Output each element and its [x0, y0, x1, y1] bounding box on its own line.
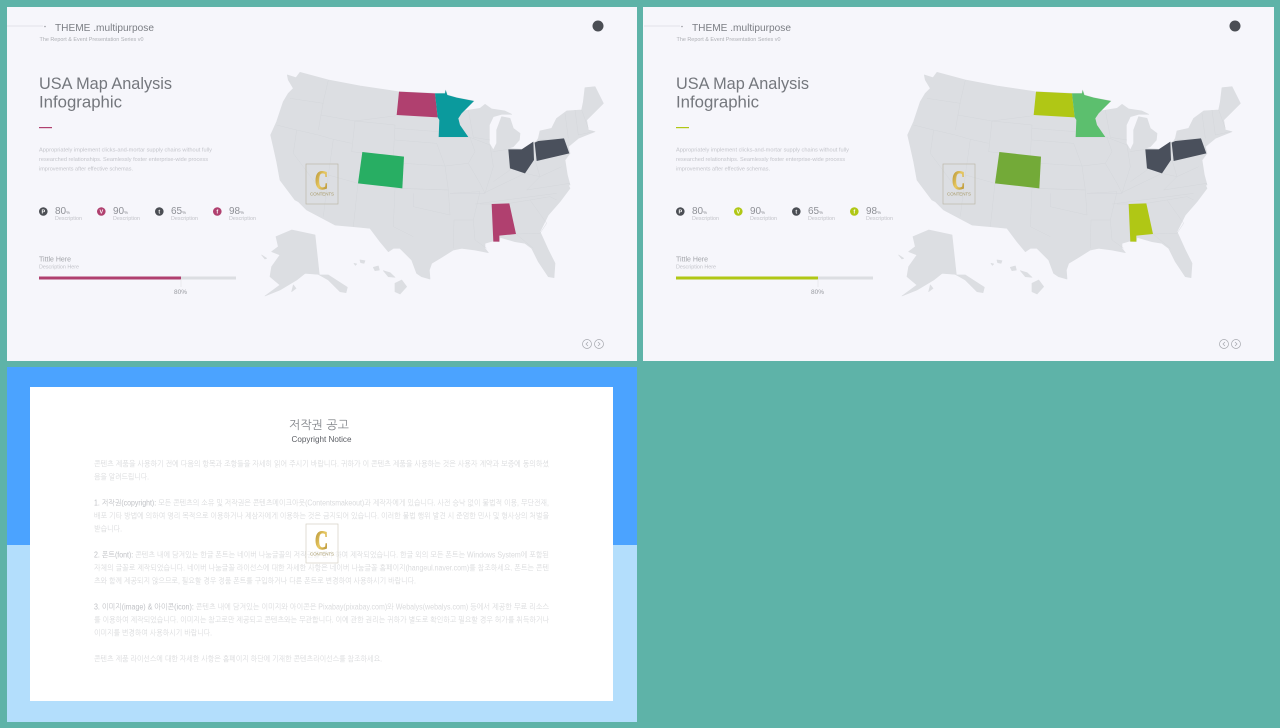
stat: 80%: Description [55, 216, 82, 222]
logo: contents watermark [306, 164, 338, 204]
stat: 98%: f [216, 210, 218, 216]
stat: 65%: t [158, 210, 160, 216]
stat: 65%: Description [808, 216, 835, 222]
stat: 65%: Description [171, 216, 198, 222]
heading: copyright notice: 저작권 공고 [289, 418, 349, 432]
text block: image and icon clause [94, 602, 549, 638]
header: theme title: The Report & Event Presentation Series v0 [40, 37, 144, 43]
header: theme title [644, 22, 791, 43]
logo: contents watermark: C [952, 166, 965, 195]
text block: copyright clause: 1. 저작권(copyright): 모든 콘텐츠의 소유 및 저작권은 콘텐츠메이크아웃(Contentsmakeout)과 제작자에게 있습니다. 사전 승낙 없이 불법적 이용, 무단전재, [94, 498, 549, 508]
text block: intro [94, 460, 549, 482]
text block: intro: 음을 알려드립니다. [94, 472, 149, 482]
nav: previous and next arrows [1220, 340, 1240, 348]
stat: 90%: Description [113, 216, 140, 222]
logo: contents watermark [306, 524, 338, 563]
stat: 98%: 98% [229, 206, 244, 217]
state: Pennsylvania [535, 138, 569, 161]
state: Ohio [508, 142, 534, 173]
progress bar: 80%: 80% [174, 289, 187, 296]
panel: slide 1 magenta theme [7, 7, 637, 361]
text block: copyright clause: 배포 기타 방법에 의하여 영리 목적으로 이용하거나 제삼자에게 이용하는 것은 금지되어 있습니다. 이러한 불법 행위 발견 시 준엄한 민사 및 형사상의 처벌을 [94, 512, 549, 520]
progress bar: 80% [676, 256, 873, 296]
progress bar: 80%: Description Here [39, 264, 79, 270]
text block: description: improvements after effective schemas. [676, 166, 770, 172]
stat: 90%: V [99, 210, 103, 216]
state: Pennsylvania [1172, 138, 1206, 161]
heading: USA Map Analysis Infographic: Infographic [39, 92, 122, 112]
stat: 80% [39, 206, 82, 222]
stat: 65%: t [795, 210, 797, 216]
logo: contents watermark: C [315, 526, 328, 555]
state: Minnesota [1072, 90, 1111, 137]
text block: description: Appropriately implement clicks-and-mortar supply chains without fully [676, 148, 850, 154]
nav: previous and next arrows [582, 340, 604, 348]
progress bar: 80%: Tittle Here [676, 256, 708, 264]
text block: image and icon clause: 이미지를 변경하여 사용하시기 바랍니다. [94, 628, 212, 638]
text block: image and icon clause: 3. 이미지(image) & 아이콘(icon): 콘텐츠 내에 담겨있는 이미지와 아이콘은 Pixabay(pixabay.com)와 Webalys(webalys.com) 등에서 제공한 무료 리소스 [94, 602, 549, 612]
icon: top right badge [592, 20, 604, 32]
stat: 90% [97, 206, 140, 222]
heading: USA Map Analysis Infographic: USA Map Analysis [39, 74, 172, 93]
header: theme title: THEME .multipurpose [692, 22, 791, 34]
stat: 90%: V [736, 210, 740, 216]
map: USA states [899, 72, 1240, 296]
text block: font clause [94, 550, 549, 586]
stat: 65%: 65% [171, 206, 186, 217]
state: Alabama [492, 203, 516, 242]
header: theme title: The Report & Event Presentation Series v0 [676, 37, 781, 43]
text block: description: researched relationships. Seamlessly foster enterprise-wide process [39, 157, 209, 163]
panel: slide 2 green theme [643, 7, 1274, 361]
logo: contents watermark: C [315, 166, 328, 195]
state: Alabama [1129, 203, 1153, 242]
progress bar: 80% [39, 256, 236, 296]
map: USA states [262, 72, 603, 296]
header: theme title: THEME .multipurpose [55, 22, 154, 34]
stat: 90%: Description [750, 216, 777, 222]
stat: 98%: f [853, 210, 855, 216]
text block: description: Appropriately implement clicks-and-mortar supply chains without fully [39, 148, 213, 154]
progress bar: 80%: Description Here [676, 264, 716, 270]
progress bar: 80%: 80% [811, 289, 824, 296]
stat: 90% [734, 206, 777, 222]
state: Ohio [1145, 142, 1171, 173]
heading: USA Map Analysis Infographic: USA Map Analysis [676, 74, 809, 93]
text block: intro: 콘텐츠 제품을 사용하기 전에 다음의 항목과 조항들을 자세히 읽어 주시기 바랍니다. 귀하가 이 콘텐츠 제품을 사용하는 것은 사용자 계약과 보증에 동의하셨 [94, 460, 549, 468]
progress bar: 80%: Tittle Here [39, 256, 71, 264]
logo: contents watermark: CONTENTS [947, 192, 971, 196]
stat: 80%: Description [692, 216, 719, 222]
state: Colorado [995, 152, 1041, 188]
logo: contents watermark [943, 164, 975, 204]
state: Minnesota [435, 90, 474, 137]
panel: copyright notice slide [7, 367, 637, 722]
text block: copyright clause [94, 498, 549, 534]
stat: 98% [213, 206, 256, 222]
state: North Dakota [397, 92, 438, 117]
stat: 98%: Description [229, 216, 256, 222]
state: Colorado [358, 152, 404, 188]
icon: top right badge [1230, 20, 1240, 32]
stat: 65% [155, 206, 198, 222]
stat: 98%: Description [866, 216, 893, 222]
accent rule [39, 127, 52, 128]
stat: 98%: 98% [866, 206, 881, 217]
accent rule [676, 127, 689, 128]
text block: font clause: 츠와 함께 제공되지 않으므로, 필요할 경우 정품 폰트를 구입하거나 다른 폰트로 변경하여 사용하시기 바랍니다. [94, 576, 416, 586]
text block: copyright clause: 받습니다. [94, 524, 122, 534]
stat: 90%: 90% [113, 206, 128, 217]
stat: 80% [676, 206, 719, 222]
text block: image and icon clause: 를 이용하여 제작되었습니다. 이미지는 참고로만 제공되고 콘텐츠와는 무관합니다. 이에 관한 권리는 귀하가 별도로 확인하고 필요할 경우 허가를 취득하거나 [94, 616, 549, 624]
logo: contents watermark: CONTENTS [310, 192, 334, 196]
text block: description [676, 148, 850, 172]
text block: description [39, 148, 213, 172]
text block: license footer: 콘텐츠 제품 라이선스에 대한 자세한 사항은 홈페이지 하단에 기재한 콘텐츠라이선스를 참조하세요. [94, 654, 382, 664]
heading: copyright notice [289, 418, 352, 444]
stat: 80%: P [41, 210, 45, 216]
stat: 80%: 80% [55, 206, 70, 217]
heading: USA Map Analysis Infographic [676, 74, 809, 112]
text block: description: improvements after effective schemas. [39, 166, 133, 172]
stat: 65%: 65% [808, 206, 823, 217]
stat: 80%: P [678, 210, 682, 216]
text block: description: researched relationships. Seamlessly foster enterprise-wide process [676, 157, 846, 163]
state: North Dakota [1034, 92, 1075, 117]
heading: USA Map Analysis Infographic [39, 74, 172, 112]
stat: 80%: 80% [692, 206, 707, 217]
logo: contents watermark: CONTENTS [310, 552, 334, 556]
stat: 65% [792, 206, 835, 222]
text block: font clause: 2. 폰트(font): 콘텐츠 내에 담겨있는 한글 폰트는 네이버 나눔글꼴의 저작권을 준수하여 제작되었습니다. 한글 외의 모든 폰트는 Windows System에 포함된 [94, 550, 549, 560]
text block: font clause: 자체의 글꼴로 제작되었습니다. 네이버 나눔글꼴 라이선스에 대한 자세한 사항은 네이버 나눔글꼴 홈페이지(hangeul.naver.com)를 참조하세요. 폰트는 콘텐 [94, 564, 549, 572]
stat: 90%: 90% [750, 206, 765, 217]
heading: copyright notice: Copyright Notice [292, 434, 352, 444]
heading: USA Map Analysis Infographic: Infographic [676, 92, 759, 112]
header: theme title [7, 22, 154, 43]
stat: 98% [850, 206, 893, 222]
